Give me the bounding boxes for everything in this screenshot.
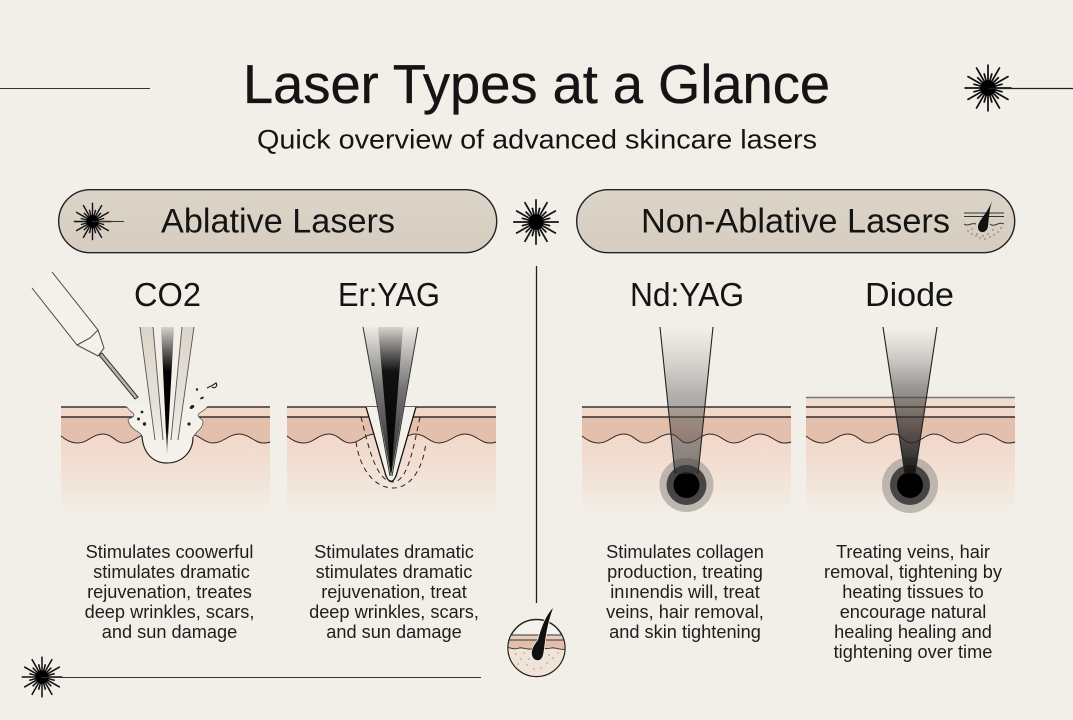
panel: non-ablative lasers header	[577, 190, 1015, 253]
CO2 description: stimulates dramatic	[93, 562, 250, 582]
Diode description: encourage natural	[840, 602, 986, 622]
channel	[366, 407, 416, 482]
CO2 description: and sun damage	[102, 622, 237, 642]
Nd:YAG description: Stimulates collagen	[606, 542, 764, 562]
icon: pill starburst	[74, 203, 124, 240]
panel: ablative lasers header	[59, 190, 497, 253]
Er:YAG heading: Er:YAG	[338, 276, 440, 313]
crater	[126, 405, 208, 463]
Diode description: healing healing and	[834, 622, 992, 642]
Er:YAG description: stimulates dramatic	[316, 562, 472, 582]
CO2 description: rejuvenation, treates	[87, 582, 252, 602]
Er:YAG description: and sun damage	[326, 622, 462, 642]
Nd:YAG heading: Nd:YAG	[630, 276, 744, 313]
Nd:YAG description	[606, 542, 764, 642]
target spot	[882, 457, 938, 513]
dashed zones	[361, 417, 420, 482]
panel: Nd:YAG	[582, 276, 791, 642]
debris	[137, 388, 204, 426]
Er:YAG description: deep wrinkles, scars,	[309, 602, 479, 622]
panel: CO2	[32, 272, 270, 642]
Nd:YAG description: inınendis will, treat	[610, 582, 760, 602]
subtitle: Quick overview of advanced skincare lasers	[257, 124, 817, 154]
Er:YAG skin diagram	[287, 327, 496, 515]
title: Laser Types at a Glance	[243, 53, 830, 115]
CO2 heading: CO2	[134, 276, 201, 313]
top left rule	[0, 88, 150, 90]
beam	[140, 327, 164, 445]
column divider	[536, 266, 538, 603]
Nd:YAG description: production, treating	[607, 562, 763, 582]
CO2 description: deep wrinkles, scars,	[85, 602, 254, 622]
Er:YAG description: rejuvenation, treat	[321, 582, 467, 602]
Diode description	[824, 542, 1003, 662]
icon: bottom left starburst with rule	[22, 657, 481, 697]
icon: laser handpiece	[32, 272, 138, 399]
Diode description: heating tissues to	[842, 582, 984, 602]
panel: Er:YAG	[287, 276, 496, 642]
Diode description: tightening over time	[834, 642, 992, 662]
ablative heading: Ablative Lasers	[161, 202, 395, 240]
Nd:YAG description: and skin tightening	[609, 622, 761, 642]
beam	[883, 327, 937, 474]
icon: hair follicle circle	[506, 608, 568, 680]
Diode heading: Diode	[865, 276, 954, 313]
target spot	[660, 458, 714, 512]
Diode skin diagram	[806, 327, 1015, 515]
icon: centre starburst	[513, 199, 559, 245]
panel: Diode	[806, 276, 1015, 662]
Nd:YAG skin diagram	[582, 327, 791, 515]
Er:YAG description	[309, 542, 479, 642]
icon: top right starburst with line	[964, 64, 1073, 112]
beam	[363, 327, 418, 476]
CO2 description: Stimulates coowerful	[86, 542, 253, 562]
Diode description: Treating veins, hair	[836, 542, 990, 562]
icon: pill hair follicle	[964, 201, 1004, 240]
CO2 skin diagram	[61, 327, 270, 515]
Er:YAG description: Stimulates dramatic	[314, 542, 474, 562]
non-ablative heading: Non-Ablative Lasers	[641, 202, 950, 240]
Diode description: removal, tightening by	[824, 562, 1003, 582]
beam	[660, 327, 713, 474]
Nd:YAG description: veins, hair removal,	[606, 602, 764, 622]
CO2 description	[85, 542, 254, 642]
